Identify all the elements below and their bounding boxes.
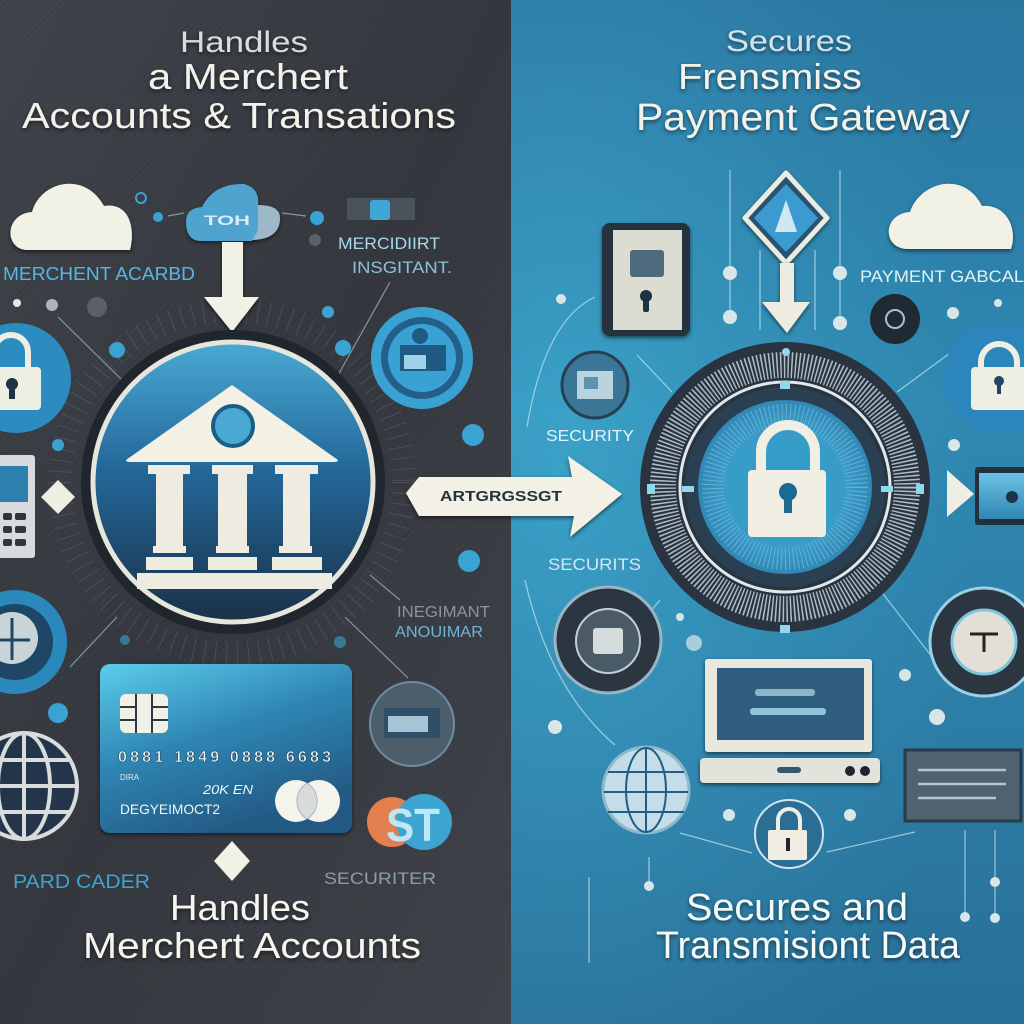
- bank roof: [126, 385, 338, 462]
- label: security: SECURITY: [546, 428, 634, 445]
- icon: bank circle: [81, 330, 385, 634]
- label: securits: SECURITS: [548, 555, 641, 574]
- icon: small merchant screen: [347, 198, 415, 220]
- arrow: merchant to gateway: ARTGRGSSGT: [440, 488, 562, 505]
- ring nodes: [647, 348, 924, 633]
- heading: right bottom: Secures and: [686, 887, 908, 929]
- padlock: [748, 425, 826, 537]
- label: merchant acard: MERCHENT ACARBD: [3, 264, 195, 284]
- label: pard cader: PARD CADER: [13, 872, 150, 893]
- card logo: [275, 780, 340, 822]
- label: merchant instant: [338, 234, 452, 277]
- dots left: [13, 193, 484, 723]
- heading: left panel title: Accounts & Transations: [22, 95, 456, 136]
- icon: globe: [0, 733, 77, 839]
- label: securiter: SECURITER: [324, 869, 436, 888]
- card small label: DIRA: [120, 773, 140, 782]
- heading: left panel title: Handles: [180, 26, 308, 59]
- heading: left bottom: [83, 887, 421, 966]
- icon: right cloud: [889, 184, 1013, 249]
- label: merchant instant: MERCIDIIRT: [338, 234, 440, 253]
- arrow: down into lock ring: [762, 263, 810, 333]
- card details: 20K EN: [202, 782, 254, 797]
- label: payment gateway: PAYMENT GABCAL: [860, 267, 1024, 286]
- panel: payment gateway background: [511, 0, 1024, 1024]
- icon: right eye badge: [870, 294, 920, 344]
- icon: security badge: [562, 352, 628, 418]
- arrow: down into bank: [204, 242, 259, 332]
- icon: door lock panel: [602, 223, 690, 336]
- icon: gateway badge lower left: [555, 587, 661, 693]
- connector lines left: [58, 213, 408, 678]
- icon: main lock ring: [640, 342, 930, 633]
- icon: ST logo: [367, 794, 452, 851]
- icon: right padlock badge: [943, 323, 1024, 433]
- label: merchant anouniar: [395, 604, 490, 641]
- icon: store badge: [370, 682, 454, 766]
- heading: right panel title: Secures: [726, 25, 852, 58]
- heading: left bottom: Merchert Accounts: [83, 925, 421, 966]
- icon: left cloud: [10, 184, 132, 250]
- icon: left bottom badge: [0, 590, 67, 694]
- icon: small cloud server: [186, 184, 280, 241]
- heading: right panel title: [636, 25, 970, 139]
- icon: server panel: [905, 750, 1021, 821]
- label: merchant anouniar: ANOUIMAR: [395, 624, 483, 641]
- bank columns: [137, 465, 332, 589]
- heading: left bottom: Handles: [170, 887, 310, 928]
- icon: diamond: [41, 480, 75, 514]
- icon: right device: [975, 467, 1024, 525]
- icon: payment terminal: [0, 455, 35, 558]
- arrow: merchant to gateway: [406, 456, 622, 537]
- heading: right bottom: Transmisiont Data: [656, 925, 961, 967]
- card chip: [120, 694, 168, 733]
- panel: merchant account background: [0, 0, 511, 1024]
- label: merchant instant: INSGITANT.: [352, 258, 452, 277]
- label: merchant anouniar: INEGIMANT: [397, 604, 490, 621]
- icon: diamond lock: [745, 173, 827, 263]
- heading: right bottom: [656, 887, 961, 967]
- connector lines right: [525, 170, 995, 963]
- heading: right panel title: Payment Gateway: [636, 97, 970, 139]
- radial ticks around bank: [60, 310, 404, 654]
- bank medallion: [213, 406, 253, 446]
- icon: left padlock badge: [0, 323, 71, 433]
- heading: left panel title: a Merchert: [148, 56, 348, 97]
- icon: monitor and base: [700, 659, 880, 783]
- icon: right globe: [603, 747, 689, 833]
- icon: gateway badge lower right: [930, 588, 1024, 696]
- dots right: [548, 266, 1002, 923]
- heading: left panel title: [22, 26, 456, 136]
- icon: ST logo: ST: [386, 799, 440, 851]
- icon: small lock badge: [755, 800, 823, 868]
- icon: small cloud server: TOH: [204, 212, 250, 228]
- icon: lower diamond: [214, 841, 250, 881]
- card holder: DEGYEIMOCT2: [120, 801, 220, 817]
- icon: eye badge: [371, 307, 473, 409]
- icon: credit card: [100, 664, 352, 833]
- heading: right panel title: Frensmiss: [678, 56, 862, 97]
- card number: 0881 1849 0888 6683: [118, 749, 331, 766]
- icon: right arrowhead: [947, 470, 974, 517]
